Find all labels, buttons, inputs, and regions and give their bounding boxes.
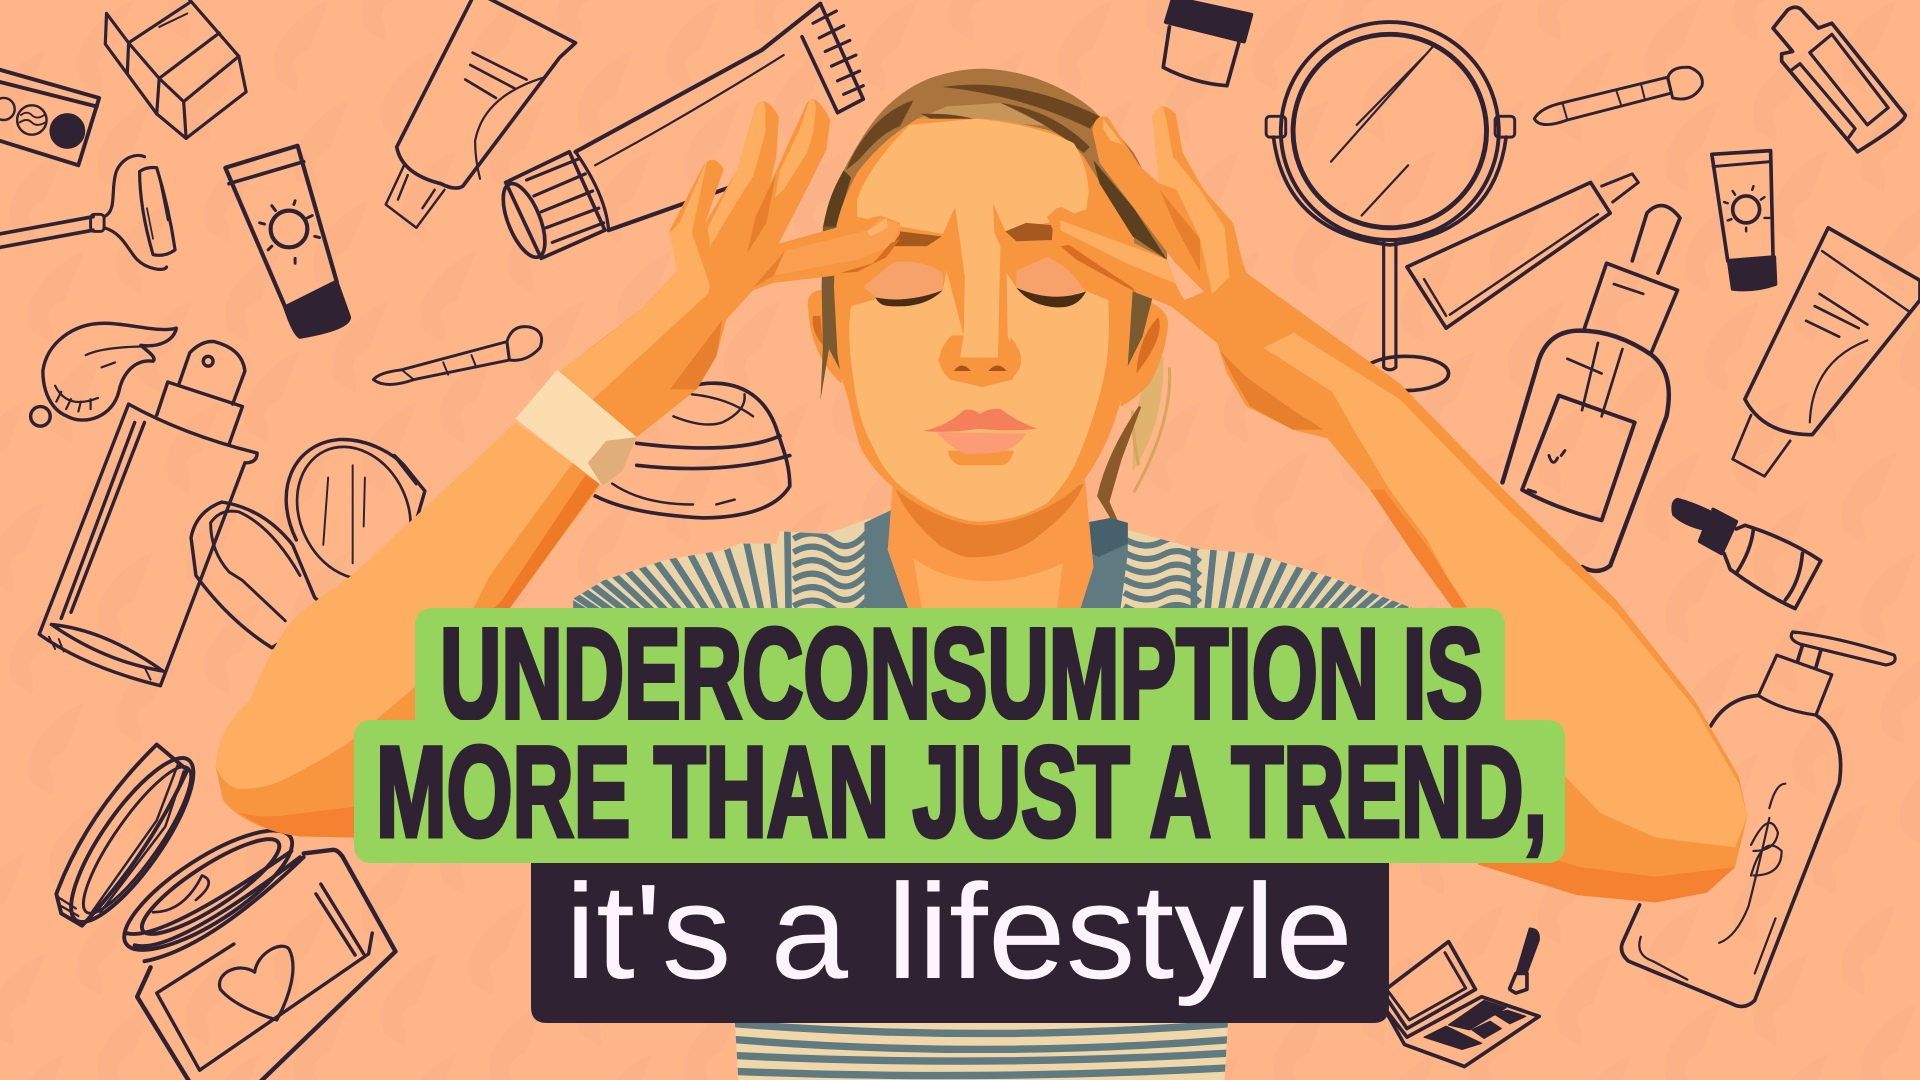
pressing finger	[1047, 207, 1188, 306]
icon: small sunscreen tube	[1712, 151, 1776, 290]
watch band	[516, 370, 637, 486]
icon: swab right	[1534, 67, 1702, 125]
dark highlight line 3: it's a lifestyle	[565, 856, 1353, 1007]
brows	[891, 231, 942, 246]
icon: open jar with heart	[52, 743, 396, 1080]
icon: large tube with ribbed cap	[495, 4, 863, 263]
front finger	[1092, 116, 1206, 294]
heart	[219, 946, 293, 1020]
ponytail wisps	[1098, 355, 1170, 557]
left hand	[557, 99, 900, 437]
left arm	[216, 422, 602, 845]
icon: compact mirror	[191, 428, 432, 648]
icon: tube top centre	[386, 0, 576, 228]
icon: soap bar	[105, 0, 246, 138]
back finger	[1152, 106, 1298, 355]
face	[830, 119, 1136, 525]
jar neck	[109, 810, 308, 970]
hair crown	[823, 69, 1167, 294]
icon: bottom palette and brush	[1382, 928, 1539, 1067]
icon: makeup swab left	[373, 327, 542, 384]
icon: spray bottle	[39, 342, 257, 686]
icon: standing mirror	[1266, 22, 1515, 391]
icon: small dropper bottle	[1673, 500, 1821, 609]
lower face light	[849, 271, 1109, 522]
icon: sunscreen tube	[225, 146, 349, 337]
icon: pump bottle	[1621, 632, 1895, 1006]
icon: face roller	[0, 155, 175, 269]
forehead and nose bridge light	[857, 119, 1089, 358]
headline	[354, 603, 1565, 1023]
hair side strands	[820, 160, 1167, 400]
eyelids	[863, 262, 943, 304]
eyelashes	[876, 290, 943, 306]
icon: bottle top right	[1773, 7, 1905, 152]
icon: eyeshadow palette top left	[0, 70, 99, 165]
icon: dropper serum bottle	[1502, 206, 1680, 571]
jar lid	[52, 743, 213, 937]
right shoulder stripes	[1120, 530, 1412, 608]
right hand	[1047, 106, 1298, 355]
icon: long ointment tube	[1407, 174, 1638, 328]
woman illustration	[216, 69, 1747, 1080]
ears	[808, 290, 1168, 407]
icon: tube right	[1733, 228, 1920, 476]
left shoulder stripes	[573, 518, 870, 608]
icon: small jar top	[1163, 0, 1251, 86]
icon: cream jar centre	[595, 383, 790, 518]
jar body	[137, 850, 396, 1080]
right arm	[1171, 233, 1747, 902]
shirt shoulders	[573, 510, 1412, 608]
neck	[888, 478, 1093, 610]
collar	[864, 509, 909, 610]
icon: cream smear	[31, 323, 176, 426]
shirt bottom	[735, 1023, 1228, 1080]
lips	[948, 451, 1014, 465]
nose	[939, 336, 964, 380]
